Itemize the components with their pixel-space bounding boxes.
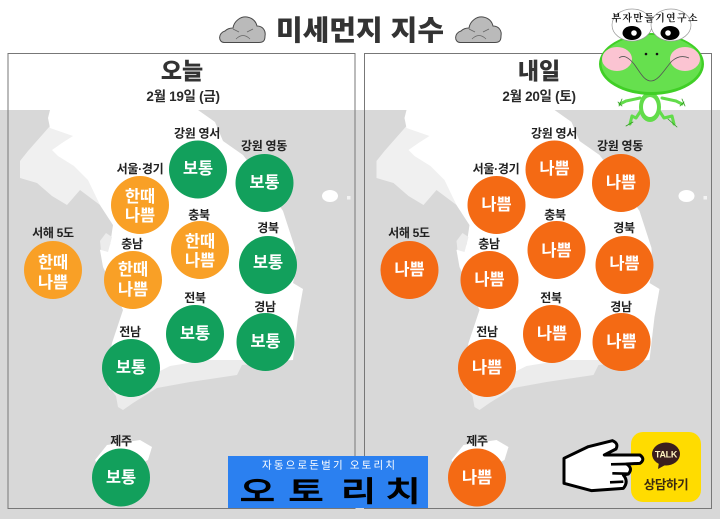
region: 서해 5도: 나쁨 — [394, 260, 425, 279]
icon: pointing hand — [564, 441, 643, 491]
icon: talk bubble: TALK — [655, 450, 678, 460]
panel: today — [8, 54, 355, 508]
icon: frog mascot — [599, 9, 704, 127]
region: 충북: 나쁨 — [541, 241, 572, 260]
region: 충북 — [171, 208, 229, 279]
region: 서울·경기: 나쁨 — [481, 195, 512, 214]
region: 충남: 한때 — [118, 260, 148, 279]
region: 전남: 나쁨 — [472, 358, 502, 377]
region: 충남 — [460, 237, 518, 309]
region: 전북: 전북 — [540, 291, 562, 305]
region: 충북: 충북 — [544, 208, 566, 222]
region: 서울·경기 — [468, 161, 526, 234]
region: 서해 5도: 한때 — [38, 253, 68, 272]
region: 강원 영서 — [169, 126, 227, 198]
button: 카카오톡 상담하기 — [631, 432, 701, 502]
region: 서해 5도: 서해 5도 — [388, 226, 430, 240]
region: 제주: 나쁨 — [462, 468, 492, 487]
region: 전남: 보통 — [116, 359, 146, 377]
region: 서울·경기: 서울·경기 — [473, 161, 519, 176]
region: 충북: 나쁨 — [185, 251, 215, 270]
region: 경남: 나쁨 — [606, 332, 637, 351]
region: 충북: 한때 — [185, 232, 215, 251]
region: 서울·경기: 한때 — [125, 187, 155, 206]
icon: left cloud — [220, 17, 265, 42]
region: 강원 영동 — [236, 139, 294, 212]
region: 강원 영동: 보통 — [249, 174, 280, 192]
region: 서울·경기: 서울·경기 — [117, 161, 163, 176]
region: 전북 — [166, 291, 224, 363]
banner: 오토리치: 오토리치 — [240, 468, 421, 509]
title: 미세먼지 지수: 미세먼지 지수 — [276, 15, 444, 46]
region: 경북: 나쁨 — [609, 254, 640, 273]
region: 제주: 제주 — [466, 433, 488, 448]
region: 서해 5도 — [24, 226, 82, 299]
region: 경남: 경남 — [254, 300, 276, 314]
region: 전북: 보통 — [180, 325, 210, 343]
heading: 오늘: 오늘 — [161, 58, 203, 84]
region: 강원 영서 — [526, 126, 584, 198]
region: 전남 — [458, 325, 516, 397]
region: 강원 영동: 강원 영동 — [241, 139, 287, 153]
region: 서울·경기 — [111, 161, 169, 234]
region: 제주: 보통 — [106, 469, 136, 487]
grey map background band — [0, 110, 720, 519]
date: 2월 19일 (금): 2월 19일 (금) — [146, 88, 220, 104]
icon: right cloud — [456, 17, 501, 42]
region: 경남: 보통 — [250, 333, 281, 351]
region: 경북: 경북 — [257, 221, 279, 235]
region: 전북: 나쁨 — [537, 324, 567, 343]
region: 경북: 보통 — [253, 254, 283, 272]
frog caption: 부자만들기연구소 — [612, 10, 698, 24]
region: 강원 영동 — [592, 139, 650, 212]
region: 충남 — [104, 237, 162, 309]
region: 제주: 제주 — [110, 433, 132, 448]
region: 경북: 경북 — [613, 221, 635, 235]
region: 충북: 충북 — [188, 208, 210, 222]
region: 전북 — [523, 291, 581, 363]
region: 강원 영동: 강원 영동 — [597, 139, 643, 153]
region: 강원 영서: 강원 영서 — [174, 126, 220, 140]
region: 전남: 전남 — [119, 325, 141, 339]
region: 전남 — [102, 325, 160, 397]
region: 경남 — [236, 300, 294, 371]
region: 충남: 충남 — [478, 237, 500, 251]
banner: 오토리치: 자동으로돈벌기 오토리치 — [262, 460, 395, 472]
region: 전북: 전북 — [184, 291, 206, 305]
region: 강원 영서: 나쁨 — [539, 159, 570, 178]
region: 전남: 전남 — [476, 325, 498, 339]
region: 서해 5도: 서해 5도 — [32, 226, 74, 240]
region: 충북 — [528, 208, 586, 279]
region: 강원 영서: 강원 영서 — [531, 126, 577, 140]
region: 경남: 경남 — [610, 300, 632, 314]
region: 서해 5도: 나쁨 — [38, 273, 68, 292]
banner: 오토리치 — [228, 456, 428, 509]
panel: tomorrow — [364, 54, 712, 508]
region: 제주 — [92, 433, 150, 506]
region: 경북 — [596, 221, 654, 294]
button: 카카오톡 상담하기: 상담하기 — [644, 477, 688, 492]
region: 강원 영서: 보통 — [183, 160, 213, 178]
region: 충남: 나쁨 — [118, 280, 148, 299]
heading: 내일: 내일 — [518, 58, 560, 84]
region: 제주 — [448, 433, 506, 506]
date: 2월 20일 (토): 2월 20일 (토) — [502, 88, 576, 104]
region: 충남: 나쁨 — [474, 270, 505, 289]
region: 경북 — [239, 221, 297, 294]
region: 충남: 충남 — [121, 237, 143, 251]
region: 경남 — [592, 300, 650, 371]
region: 서해 5도 — [380, 226, 438, 299]
region: 강원 영동: 나쁨 — [606, 173, 636, 192]
region: 서울·경기: 나쁨 — [125, 206, 155, 225]
